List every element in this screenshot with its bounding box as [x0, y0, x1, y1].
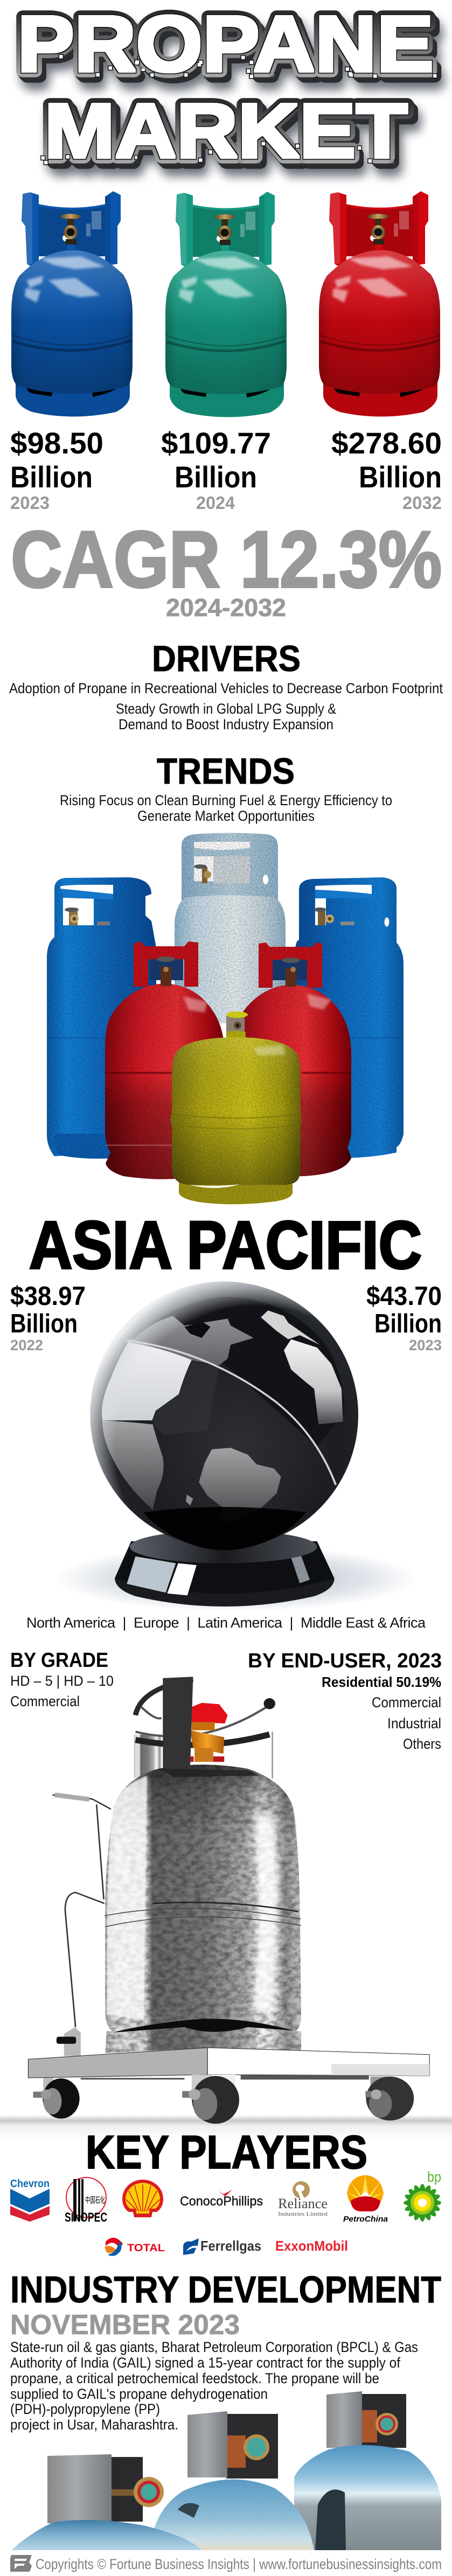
asia pacific 2023 value: 2023 [409, 1337, 442, 1353]
heading: key players: KEY PLAYERS [86, 2126, 367, 2179]
middle tank [150, 2411, 314, 2550]
icon: blue cylinder left [47, 877, 156, 1158]
logo: Ferrellgas [183, 2238, 261, 2255]
title: PROPANE [17, 0, 434, 88]
by grade segment: Commercial [10, 1693, 80, 1709]
market size 2024: 2024 [196, 493, 235, 513]
industry development text: propane, a critical petrochemical feedstock. The propane will be [10, 2370, 379, 2386]
industry development text: Authority of India (GAIL) signed a 15-year contract for the supply of [10, 2355, 400, 2371]
trends text [60, 792, 392, 824]
right tank [294, 2391, 441, 2550]
left tank [11, 2454, 202, 2550]
logo: PetroChina: PetroChina [343, 2215, 388, 2224]
logo: Chevron: Chevron [10, 2178, 50, 2190]
by grade segment: BY GRADE [10, 1649, 108, 1672]
heading: trends: TRENDS [157, 751, 295, 792]
market size 2023: $98.50 [10, 426, 103, 460]
trends text: Rising Focus on Clean Burning Fuel & Energy Efficiency to [60, 792, 392, 808]
market size 2032 [331, 426, 442, 513]
industry development text: (PDH)-polypropylene (PP) [10, 2401, 160, 2417]
drivers text [9, 680, 443, 732]
icon: glass globe on stand [54, 1282, 418, 1611]
logo: Sinopec: 中国石化 [85, 2196, 105, 2205]
asia pacific 2022 value: $38.97 [10, 1282, 86, 1311]
by end-user segment: BY END-USER, 2023 [248, 1650, 442, 1672]
market size 2024 [161, 426, 271, 513]
by end-user segment: Others [403, 1736, 441, 1752]
trends text: Generate Market Opportunities [137, 808, 315, 824]
asia pacific 2023 value [366, 1282, 442, 1353]
by grade segment: HD – 5 | HD – 10 [10, 1673, 114, 1689]
title [17, 0, 434, 174]
logo: Reliance: Industries Limited [278, 2211, 328, 2217]
logo: ExxonMobil: ExxonMobil [275, 2238, 348, 2254]
logo: bp: bp [427, 2169, 441, 2185]
industry development text: supplied to GAIL's propane dehydrogenation [10, 2386, 268, 2402]
market size 2032: Billion [359, 460, 442, 494]
asia pacific 2023 value: $43.70 [366, 1282, 442, 1311]
cylinder group illustration [47, 833, 404, 1204]
icon: blue cylinder right [291, 877, 404, 1158]
logo: Sinopec [65, 2177, 107, 2225]
logo: ConocoPhillips: ConocoPhillips [180, 2194, 263, 2209]
logo: Sinopec: SINOPEC [65, 2210, 107, 2225]
market size 2024: Billion [175, 460, 257, 494]
by end-user segment: Residential 50.19% [322, 1674, 441, 1690]
asia pacific 2022 value: 2022 [10, 1337, 43, 1353]
market size 2024: $109.77 [161, 426, 271, 460]
CAGR: 2024-2032 [166, 594, 286, 622]
asia pacific 2022 value: Billion [10, 1309, 78, 1338]
by grade segment [10, 1649, 114, 1709]
logo: Reliance: Reliance [278, 2196, 328, 2211]
market size 2032: $278.60 [331, 426, 442, 460]
logo: Reliance [278, 2181, 328, 2217]
icon: red cylinder left [105, 941, 225, 1179]
logo: Total [105, 2237, 165, 2256]
icon: red cylinder right [235, 943, 351, 1176]
drivers text: Demand to Boost Industry Expansion [119, 716, 333, 732]
logo: Shell [122, 2180, 163, 2217]
industry development text [10, 2339, 418, 2433]
logo: Chevron [10, 2178, 50, 2222]
by end-user segment: Commercial [372, 1694, 441, 1711]
market size 2023: Billion [10, 460, 93, 494]
tank on cart illustration [0, 1677, 452, 2140]
market size 2023: 2023 [10, 493, 50, 513]
logo: bp [404, 2169, 441, 2222]
asia pacific 2022 value [10, 1282, 86, 1353]
by end-user segment [248, 1650, 442, 1752]
heading: drivers: DRIVERS [152, 638, 301, 679]
market size 2032: 2032 [402, 493, 442, 513]
industry development text: project in Usar, Maharashtra. [10, 2417, 178, 2433]
icon: yellow cylinder [170, 1011, 302, 1204]
logo: Total: TOTAL [127, 2243, 165, 2254]
logo: PetroChina [343, 2175, 388, 2224]
market size 2023 [10, 426, 103, 513]
by end-user segment: Industrial [387, 1715, 441, 1732]
regions list: North America | Europe | Latin America | Middle East & Africa [26, 1615, 426, 1631]
subheading: november 2023: NOVEMBER 2023 [10, 2309, 240, 2341]
icon: green cylinder [165, 192, 287, 417]
drivers text: Steady Growth in Global LPG Supply & [116, 701, 336, 717]
icon: blue cylinder [11, 191, 133, 417]
icon: fortune business insights logo [10, 2555, 32, 2572]
icon: red cylinder [319, 191, 440, 417]
icon: silver cylinder [175, 833, 286, 1023]
title: MARKET [44, 88, 408, 174]
tanks illustration [11, 2391, 441, 2550]
logo: Ferrellgas: Ferrellgas [200, 2238, 261, 2254]
